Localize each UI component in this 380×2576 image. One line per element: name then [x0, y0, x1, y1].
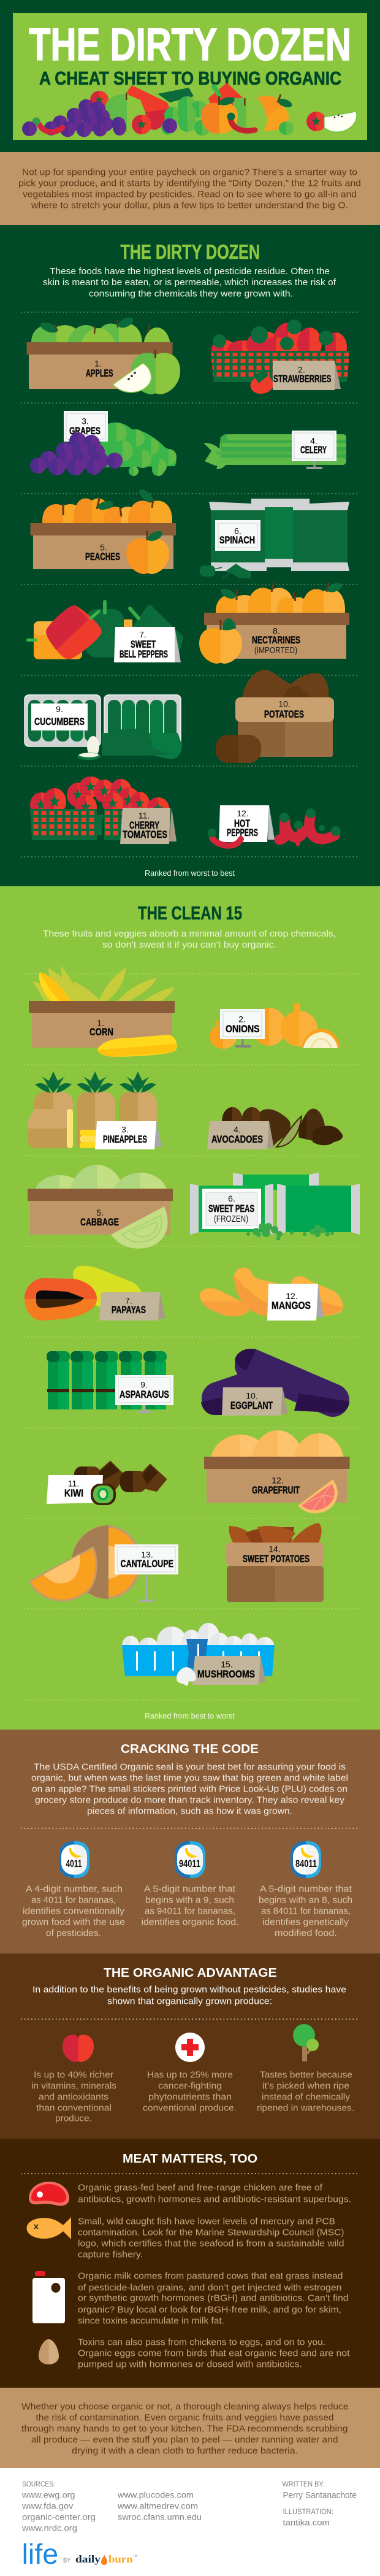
heading: meat matters, too: MEAT MATTERS, TOO [123, 2152, 257, 2166]
organic advantage intro: shown that organically grown produce: [107, 1997, 272, 2007]
clean item: 12 mangos: 12. [286, 1291, 298, 1301]
section: clean 15 background [0, 886, 380, 1730]
text: organic code: begins with a 9, such [145, 1895, 234, 1905]
text: organic code [141, 1884, 239, 1927]
clean item: 3 pineapples [28, 1071, 162, 1149]
closing text: drying it with a clean cloth to further reduce bacteria. [72, 2446, 298, 2456]
section: organic advantage background [0, 1953, 380, 2139]
sources: SOURCES: [22, 2480, 55, 2488]
sticker: 4011: 4011 [66, 1858, 82, 1869]
text: beef: antibiotics, growth hormones and antibiotic-resistant superbugs. [78, 2195, 351, 2204]
dirty dozen description: consuming the chemicals they were grown with. [89, 289, 293, 299]
text: gmo code: as 84011 for bananas, [261, 1906, 351, 1916]
clean item: 12 mangos: MANGOS [272, 1300, 311, 1311]
clean item: 14 sweet potatoes [226, 1523, 324, 1602]
cracking the code text: organic, but when was the last time you saw that big green and white label [31, 1774, 348, 1784]
logo: life by daily burn: burn [108, 2553, 133, 2565]
text: richer: Is up to 40% richer [34, 2071, 113, 2080]
credits: Perry Santanachote [283, 2490, 357, 2501]
text: conventional code [22, 1884, 125, 1938]
section: cracking the code background [0, 1730, 380, 1953]
clean item: 5 cabbage [28, 1165, 173, 1249]
clean item: 7 papayas [25, 1266, 165, 1321]
text: phytonutrients: phytonutrients than [148, 2093, 232, 2103]
clean 15 description: These fruits and veggies absorb a minimal amount of crop chemicals, [43, 929, 336, 939]
note: ranked worst to best: Ranked from worst to best [145, 868, 235, 878]
section: header band [0, 0, 380, 152]
item: 9 cucumbers: 9. [56, 704, 63, 714]
intro text: where to stretch your dollar, plus a few tips to better understand the big O. [31, 201, 348, 211]
intro text: vegetables most impacted by pesticides. Read on to see where to go all-in and [23, 190, 357, 200]
text: fish: Small, wild caught fish have lower levels of mercury and PCB [78, 2217, 335, 2226]
text: phytonutrients: cancer-fighting [158, 2082, 222, 2091]
cracking the code text: pieces of information, such as how it was grown. [87, 1807, 292, 1817]
clean item: 5 cabbage: 5. [96, 1208, 104, 1217]
sources: swroc.cfans.umn.edu [118, 2512, 202, 2522]
text: phytonutrients: conventional produce. [143, 2104, 237, 2114]
panel: header green [13, 13, 367, 140]
clean item: 12 grapefruit [204, 1430, 349, 1513]
sources: www.ewg.org [21, 2490, 75, 2500]
section: dirty dozen background [0, 225, 380, 886]
clean item: 5 cabbage: CABBAGE [80, 1217, 119, 1228]
sources: www.nrdc.org [21, 2523, 77, 2533]
heading: cracking the code: CRACKING THE CODE [121, 1742, 259, 1756]
organic advantage intro [32, 1985, 346, 2007]
text: taste: Tastes better because [260, 2071, 352, 2080]
item: 7 sweet bell peppers: SWEET [131, 639, 156, 650]
clean item: 1 corn: 1. [97, 1018, 104, 1028]
clean item: 3 pineapples: 3. [121, 1125, 129, 1135]
clean item: 6 sweet peas: (FROZEN) [214, 1214, 248, 1224]
spinach sign [215, 520, 260, 551]
text: beef [78, 2183, 351, 2204]
text: fish: logo, which certifies that the seafood is from a sustainable wild [78, 2239, 344, 2248]
closing text [21, 2402, 348, 2456]
clean item: 13 cantaloupe: CANTALOUPE [120, 1558, 173, 1570]
text: gmo code: A 5-digit number that [260, 1884, 352, 1894]
clean item: 4 avocados [207, 1107, 343, 1149]
sources: www.fda.gov [21, 2501, 74, 2511]
text: gmo code: identifies genetically [262, 1917, 349, 1927]
credits: tantika.com [283, 2518, 330, 2527]
sticker: 4011 [59, 1841, 89, 1878]
logo: life by daily burn: BY [63, 2557, 71, 2564]
text: organic code: A 5-digit number that [144, 1884, 235, 1894]
spinach sign: SPINACH [219, 535, 255, 546]
text: taste: ripened in warehouses. [257, 2104, 354, 2114]
text: phytonutrients: Has up to 25% more [147, 2071, 233, 2080]
clean item: 15 mushrooms [122, 1623, 275, 1686]
item: 5 peaches: PEACHES [85, 551, 120, 562]
item: 11 cherry tomatoes: 11. [139, 811, 150, 821]
sources: www.plucodes.com [117, 2490, 194, 2500]
item: 8 nectarines [199, 581, 349, 664]
logo: life by daily burn [22, 2538, 137, 2570]
item: 6 spinach [200, 499, 349, 578]
text: taste [257, 2071, 354, 2114]
text: richer: than conventional [36, 2104, 112, 2114]
text: taste: instead of chemically [262, 2093, 351, 2103]
credits: WRITTEN BY: [282, 2480, 325, 2488]
clean item: 12 mangos [200, 1267, 343, 1321]
icon: red cross [175, 2033, 205, 2062]
clean item: 1 corn: CORN [89, 1027, 113, 1038]
item: 7 sweet bell peppers [26, 600, 181, 662]
item: 11 cherry tomatoes: CHERRY [129, 820, 159, 831]
section: closing tip [0, 2388, 380, 2468]
text: conventional code: of pesticides. [46, 1928, 101, 1938]
clean item: 9 asparagus: ASPARAGUS [120, 1389, 169, 1400]
icon: egg [39, 2339, 59, 2364]
clean item: 15 mushrooms: 15. [221, 1660, 233, 1669]
item: 1 apples: APPLES [86, 368, 113, 379]
text: gmo code [259, 1884, 352, 1938]
heading: the organic advantage: THE ORGANIC ADVANTAGE [104, 1966, 277, 1980]
heading: the clean 15: THE CLEAN 15 [138, 902, 242, 924]
spinach sign: 6. [234, 526, 241, 536]
cracking the code text [31, 1763, 348, 1817]
clean item: 6 sweet peas: SWEET PEAS [208, 1203, 254, 1214]
item: 2 strawberries: STRAWBERRIES [273, 374, 331, 385]
illustration: heap of produce [22, 83, 357, 137]
text: organic code: as 94011 for bananas, [145, 1906, 235, 1916]
credits: ILLUSTRATION: [283, 2507, 333, 2516]
text: milk: of pesticide-laden grains, and don’t get injected with estrogen [78, 2283, 342, 2293]
text: taste: it’s picked when ripe [262, 2082, 349, 2091]
text: eggs [78, 2338, 349, 2370]
text: milk: since toxins accumulate in milk fat. [78, 2316, 224, 2326]
text: conventional code: identifies conventionally [23, 1906, 125, 1916]
clean item: 2 onions: 2. [238, 1014, 246, 1024]
item: 10 potatoes: 10. [278, 699, 291, 709]
item: 8 nectarines: (IMPORTED) [254, 645, 297, 656]
sources: www.altmedrev.com [117, 2501, 198, 2511]
clean item: 11 kiwi [47, 1462, 165, 1505]
text: milk: organic? Buy local or look for rBGH-free milk, and go for skim, [78, 2305, 341, 2315]
text: conventional code: as 4011 for bananas, [31, 1895, 116, 1905]
text: richer: and antioxidants [39, 2093, 108, 2103]
clean item: 10 eggplant [201, 1349, 349, 1416]
cracking the code text: grocery store produce do more than track inventory. They also reveal key [35, 1796, 345, 1806]
text: fish [78, 2217, 344, 2260]
text: conventional code: A 4-digit number, such [26, 1884, 123, 1894]
heading: the dirty dozen: THE DIRTY DOZEN [120, 240, 260, 263]
item: 1 apples: 1. [94, 358, 102, 368]
credits [282, 2480, 357, 2527]
sources: organic-center.org [22, 2512, 96, 2522]
logo: life by daily burn: TM [133, 2555, 137, 2558]
clean item: 2 onions: ONIONS [226, 1024, 260, 1035]
clean item: 10 eggplant: 10. [246, 1391, 258, 1401]
clean item: 9 asparagus: 9. [140, 1380, 148, 1390]
icon: tree [293, 2024, 319, 2061]
cracking the code text: on an apple? The small stickers printed with Price Look-Up (PLU) codes on [32, 1785, 348, 1795]
clean item: 7 papayas: 7. [125, 1295, 132, 1305]
closing text: all produce — even the stuff you plan to peel — under running water and [31, 2435, 338, 2445]
item: 9 cucumbers: CUCUMBERS [34, 716, 85, 727]
note: ranked best to worst: Ranked from best to worst [145, 1711, 235, 1720]
section: intro [0, 152, 380, 225]
section: meat matters background [0, 2139, 380, 2388]
sources [21, 2480, 202, 2533]
text: milk: or synthetic growth hormones (rBGH) and antibiotics. Can’t find [78, 2294, 348, 2304]
intro text [18, 168, 361, 211]
organic advantage intro: In addition to the benefits of being grown without pesticides, studies have [32, 1985, 346, 1995]
text: conventional code: grown food with the use [22, 1917, 125, 1927]
clean item: 11 kiwi: 11. [68, 1478, 79, 1488]
intro text: Not up for spending your entire paycheck on organic? There’s a smarter way to [22, 168, 357, 178]
subtitle: A CHEAT SHEET TO BUYING ORGANIC [39, 68, 341, 89]
icon: milk jug [32, 2271, 65, 2323]
item: 11 cherry tomatoes [30, 776, 177, 844]
item: 2 strawberries: 2. [298, 364, 305, 374]
text: milk [78, 2272, 348, 2326]
item: 12 hot peppers: PEPPERS [227, 827, 258, 838]
icon: fish [27, 2217, 71, 2239]
item: 10 potatoes [216, 670, 334, 763]
clean item: 15 mushrooms: MUSHROOMS [197, 1669, 255, 1680]
sticker: 94011: 94011 [179, 1858, 200, 1869]
clean item: 14 sweet potatoes: 14. [268, 1544, 281, 1554]
dirty dozen description: These foods have the highest levels of pesticide residue. Often the [50, 267, 330, 277]
logo: life by daily burn: daily [75, 2553, 101, 2565]
text: gmo code: modified food. [275, 1928, 337, 1938]
text: beef: Organic grass-fed beef and free-range chicken are free of [78, 2183, 323, 2193]
clean item: 4 avocados: AVOCADOES [211, 1134, 263, 1145]
text: richer: in vitamins, minerals [31, 2082, 116, 2091]
item: 4 celery: CELERY [300, 445, 327, 456]
text: milk: Organic milk comes from pastured cows that eat grass instead [78, 2272, 343, 2282]
section: footer [0, 2468, 380, 2576]
cracking the code text: The USDA Certified Organic seal is your best bet for assuring your food is [34, 1763, 346, 1773]
logo: life by daily burn: life [22, 2538, 58, 2570]
item: 4 celery: 4. [310, 435, 317, 445]
clean item: 12 grapefruit: GRAPEFRUIT [252, 1485, 300, 1496]
item: 1 apples [27, 315, 180, 394]
text: fish: capture fishery. [78, 2250, 143, 2260]
item: 12 hot peppers: HOT [234, 818, 250, 829]
clean item: 7 papayas: PAPAYAS [112, 1305, 146, 1316]
clean item: 11 kiwi: KIWI [64, 1488, 83, 1499]
item: 8 nectarines: 8. [273, 626, 280, 635]
closing text: Whether you choose organic or not, a thorough cleaning always helps reduce [21, 2402, 348, 2412]
dirty dozen description [43, 267, 336, 299]
closing text: the risk of contamination. Even organic fruits and veggies have passed [36, 2413, 333, 2423]
item: 10 potatoes: POTATOES [264, 709, 304, 720]
dirty dozen description: skin is meant to be eaten, or is permeable, which increases the risk of [43, 278, 336, 288]
sticker: 94011 [175, 1841, 205, 1878]
intro text: pick your produce, and it starts by identifying the “Dirty Dozen,” the 12 fruits and [18, 179, 361, 189]
clean 15 description: so don’t sweat it if you can’t buy organic. [102, 940, 276, 950]
clean item: 3 pineapples: PINEAPPLES [103, 1134, 147, 1145]
item: 4 celery [203, 431, 346, 469]
clean item: 10 eggplant: EGGPLANT [230, 1400, 273, 1411]
closing text: through many hands to get to your kitchen. The FDA recommends scrubbing [21, 2424, 348, 2434]
text: fish: contamination. Look for the Marine Stewardship Council (MSC) [78, 2228, 344, 2237]
text: richer [31, 2071, 116, 2123]
clean item: 13 cantaloupe: 13. [141, 1549, 153, 1559]
item: 2 strawberries [211, 320, 349, 394]
item: 12 hot peppers: 12. [237, 808, 249, 818]
text: gmo code: begins with an 8, such [259, 1895, 352, 1905]
icon: apple [63, 2033, 94, 2062]
item: 12 hot peppers [208, 805, 341, 846]
text: organic code: identifies organic food. [141, 1917, 239, 1927]
grapes sign: 3. [82, 416, 89, 426]
item: 8 nectarines: NECTARINES [252, 635, 300, 646]
text: eggs: Organic eggs come from birds that eat organic feed and are not [78, 2349, 349, 2359]
clean item: 6 sweet peas: 6. [228, 1194, 235, 1203]
text: eggs: Toxins can also pass from chickens to eggs, and on to you. [78, 2338, 325, 2348]
sticker: 84011: 84011 [295, 1858, 317, 1869]
text: phytonutrients [143, 2071, 237, 2114]
clean item: 2 onions [210, 1003, 340, 1049]
text: richer: produce. [55, 2114, 92, 2123]
icon: steak [29, 2182, 69, 2206]
grapes sign [64, 411, 108, 442]
text: eggs: pumped up with hormones or dosed with antibiotics. [78, 2360, 302, 2370]
sticker: 84011 [291, 1841, 321, 1878]
clean item: 6 sweet peas [190, 1173, 360, 1240]
clean item: 9 asparagus [47, 1351, 173, 1413]
item: 11 cherry tomatoes: TOMATOES [123, 829, 167, 840]
clean item: 14 sweet potatoes: SWEET POTATOES [243, 1554, 310, 1565]
item: 7 sweet bell peppers: 7. [139, 629, 146, 639]
clean 15 description [43, 929, 336, 950]
clean item: 12 grapefruit: 12. [272, 1476, 284, 1485]
clean item: 13 cantaloupe [29, 1525, 178, 1602]
item: 7 sweet bell peppers: BELL PEPPERS [120, 649, 168, 660]
item: 9 cucumbers [25, 695, 182, 760]
item: 3 grapes [30, 411, 177, 476]
grapes sign: GRAPES [69, 426, 101, 437]
clean item: 1 corn [29, 965, 177, 1057]
item: 5 peaches: 5. [100, 542, 107, 552]
item: 5 peaches [31, 488, 176, 574]
clean item: 4 avocados: 4. [234, 1125, 241, 1135]
